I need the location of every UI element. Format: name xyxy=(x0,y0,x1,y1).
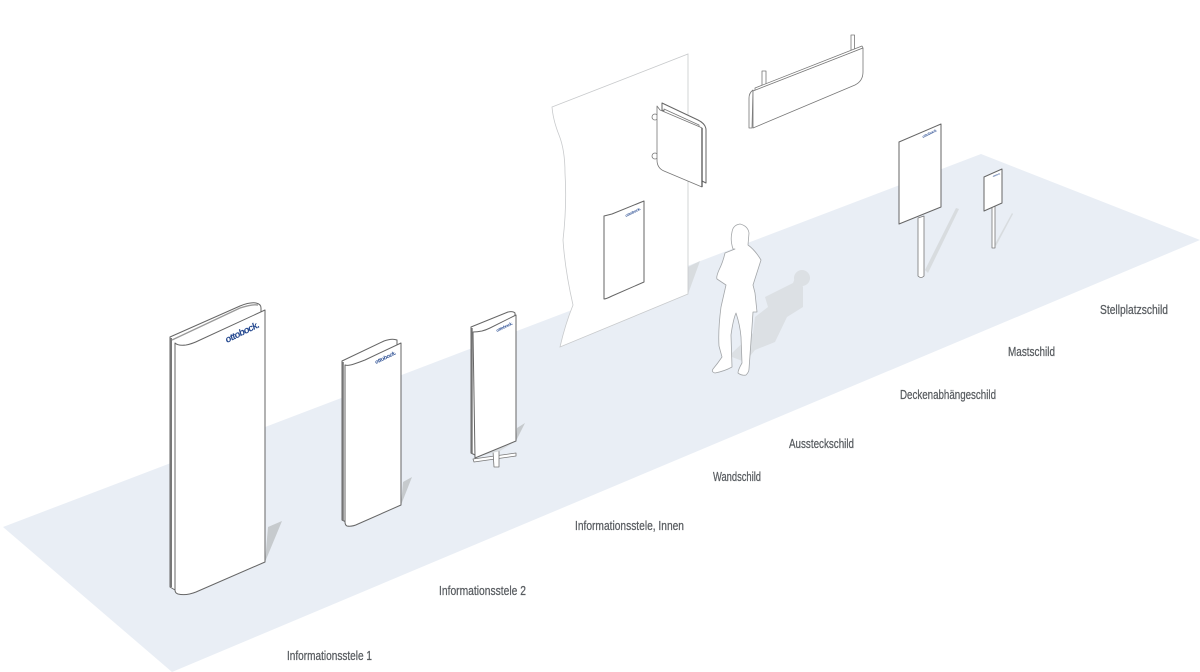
wall brackets xyxy=(652,114,658,159)
board xyxy=(899,124,941,224)
front panel xyxy=(753,48,863,128)
top flap xyxy=(611,202,642,215)
shadow xyxy=(995,213,1013,246)
back panel xyxy=(342,339,397,522)
label: Informationsstele 2 xyxy=(439,584,526,598)
label: Stellplatzschild xyxy=(1100,303,1168,317)
sign: Wandschild xyxy=(604,201,644,299)
logo: ottobock. xyxy=(625,207,642,218)
back panel xyxy=(662,103,706,183)
left edge xyxy=(170,338,172,587)
logo: ottobock. xyxy=(374,350,398,366)
shadow xyxy=(516,423,525,441)
logo: ottobock. xyxy=(495,321,514,333)
wall xyxy=(552,54,688,347)
sign: Informationsstele 2 xyxy=(342,339,412,526)
left edge xyxy=(471,328,473,453)
pole xyxy=(918,216,924,278)
label: Wandschild xyxy=(713,470,761,484)
back panel xyxy=(170,303,261,590)
front panel xyxy=(345,343,401,526)
label: Deckenabhängeschild xyxy=(900,388,996,402)
top edge xyxy=(172,305,258,340)
logo: ottobock. xyxy=(992,172,1001,178)
sign: Mastschild xyxy=(899,124,959,278)
logo: ottobock. xyxy=(223,320,262,346)
sign: Deckenabhängeschild xyxy=(749,35,863,128)
label: Aussteckschild xyxy=(789,437,854,451)
wall shadow xyxy=(688,261,700,294)
pole xyxy=(992,205,995,248)
front panel xyxy=(657,106,702,187)
left edge xyxy=(342,362,344,520)
floor plane xyxy=(3,154,1200,672)
person silhouette xyxy=(712,224,761,375)
panel xyxy=(604,201,644,299)
top edge xyxy=(755,46,863,92)
sign: Ausleger xyxy=(652,103,706,187)
front panel xyxy=(175,310,265,595)
shadow xyxy=(401,477,412,505)
person shadow xyxy=(732,270,810,362)
sign: Stellplatzschild xyxy=(984,169,1013,248)
label: Informationsstele 1 xyxy=(287,649,372,663)
board xyxy=(984,169,1002,211)
sign: Informationsstele, Innen xyxy=(471,312,525,467)
label: Mastschild xyxy=(1008,345,1055,359)
sign: Informationsstele 1 xyxy=(170,303,282,595)
head shadow xyxy=(794,270,810,286)
left edge xyxy=(749,90,753,128)
hangers xyxy=(762,35,854,87)
shadow xyxy=(265,521,282,562)
right edge xyxy=(701,128,703,187)
shadow xyxy=(925,208,959,273)
logo: ottobock. xyxy=(922,128,938,139)
label: Informationsstele, Innen xyxy=(575,519,684,533)
body shadow xyxy=(732,273,803,362)
back panel xyxy=(471,312,515,455)
front panel xyxy=(473,315,516,458)
inner strip xyxy=(664,109,699,128)
stand foot xyxy=(473,441,516,467)
